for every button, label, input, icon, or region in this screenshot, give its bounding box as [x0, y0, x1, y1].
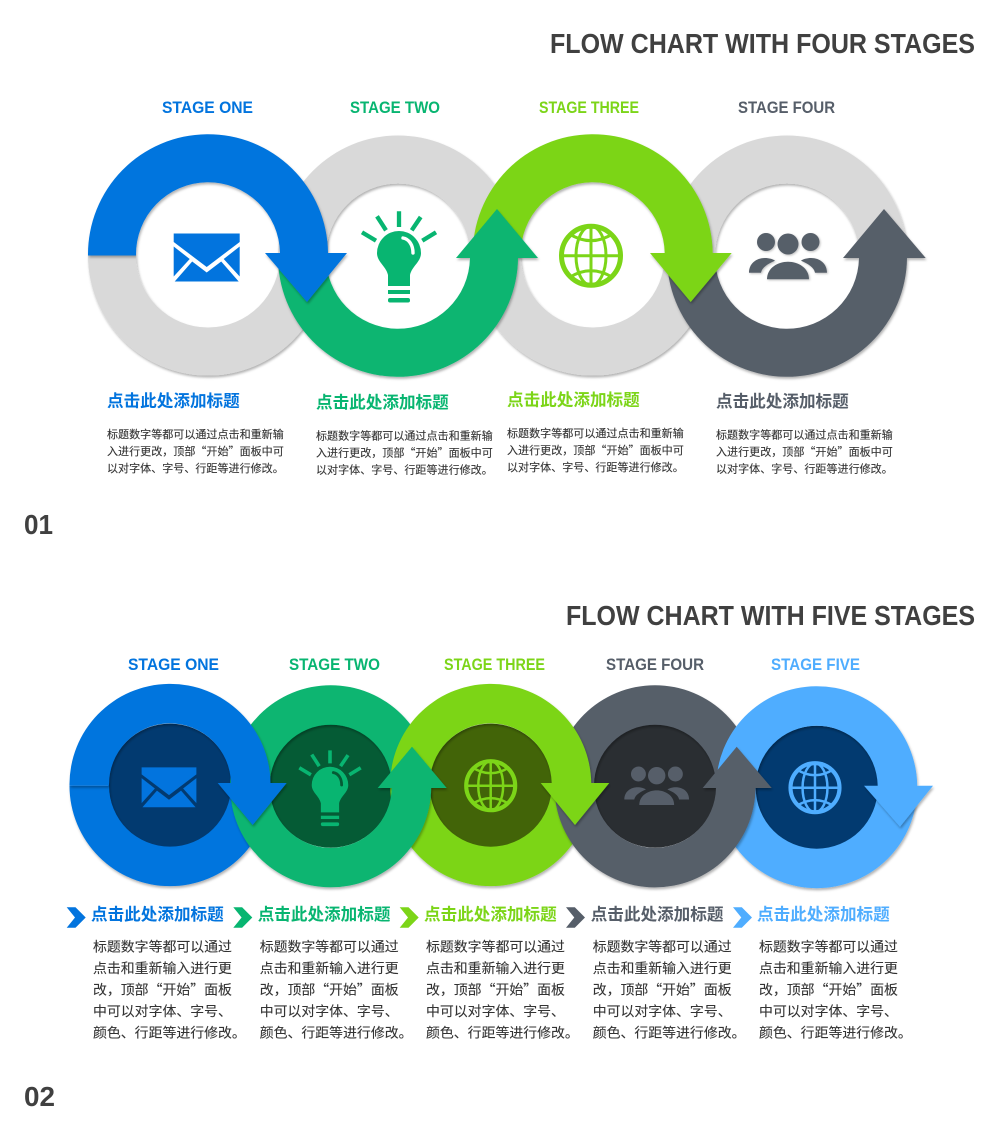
- text block: stage two: 改，顶部“开始”面板: [260, 980, 399, 1000]
- stage five label: STAGE FIVE: [771, 655, 860, 674]
- chevron: [233, 907, 252, 928]
- text block: stage one: 点击此处添加标题: [91, 901, 224, 925]
- stage two label: STAGE TWO: [350, 98, 440, 117]
- text block: stage two: 点击和重新输入进行更: [260, 958, 399, 978]
- text block: stage five: 点击此处添加标题: [757, 901, 890, 925]
- icon: light bulb: [362, 211, 436, 302]
- text block: stage five: 点击和重新输入进行更: [759, 958, 898, 978]
- text block: stage four: 入进行更改，顶部“开始”面板中可: [716, 444, 893, 460]
- stage three label: STAGE THREE: [539, 98, 639, 117]
- text block: stage two: 以对字体、字号、行距等进行修改。: [316, 462, 493, 478]
- stage one label: STAGE ONE: [128, 655, 219, 674]
- arrow arc: stage four: [554, 747, 772, 887]
- text block: stage five: 改，顶部“开始”面板: [759, 980, 898, 1000]
- chevron: [733, 907, 752, 928]
- text block: stage three: 点击此处添加标题: [424, 901, 557, 925]
- text block: stage five: [733, 901, 912, 1042]
- icon: people: [624, 767, 689, 805]
- arrow arc: stage two: [230, 747, 447, 887]
- text block: stage one: [107, 388, 284, 476]
- text block: stage two: 标题数字等都可以通过: [260, 936, 399, 956]
- text block: stage three: 点击此处添加标题: [507, 386, 640, 410]
- arrow arc: stage three: [473, 134, 732, 302]
- text block: stage three: 标题数字等都可以通过: [426, 936, 565, 956]
- text block: stage one: 以对字体、字号、行距等进行修改。: [107, 460, 284, 476]
- text block: stage two: 颜色、行距等进行修改。: [260, 1022, 413, 1042]
- chart: five-stage linked circle flow: [69, 684, 933, 888]
- text block: stage one: 点击此处添加标题: [107, 388, 240, 412]
- text block: stage one: 中可以对字体、字号、: [93, 1001, 232, 1021]
- stage four label: STAGE FOUR: [738, 98, 835, 117]
- section number 02: 02: [24, 1081, 55, 1112]
- text block: stage four: 改，顶部“开始”面板: [593, 980, 732, 1000]
- text block: stage one: 标题数字等都可以通过点击和重新输: [107, 426, 284, 442]
- text block: stage four: 点击和重新输入进行更: [593, 958, 732, 978]
- text block: stage two: 中可以对字体、字号、: [260, 1001, 399, 1021]
- text block: stage five: 中可以对字体、字号、: [759, 1001, 898, 1021]
- text block: stage one: 入进行更改，顶部“开始”面板中可: [107, 443, 284, 459]
- text block: stage three: 标题数字等都可以通过点击和重新输: [507, 425, 684, 441]
- text block: stage four: 标题数字等都可以通过: [593, 936, 732, 956]
- text block: stage three: [507, 386, 684, 475]
- chevron: [400, 907, 419, 928]
- text block: stage three: 以对字体、字号、行距等进行修改。: [507, 459, 684, 475]
- grey ring background segments: [88, 136, 907, 376]
- text block: stage two: 入进行更改，顶部“开始”面板中可: [316, 444, 493, 460]
- icon: light bulb: [299, 750, 361, 826]
- text block: stage two: 点击此处添加标题: [316, 389, 449, 413]
- chart: four-stage linked ring flow: [88, 134, 926, 377]
- text block: stage four: 中可以对字体、字号、: [593, 1001, 732, 1021]
- text block: stage three: 中可以对字体、字号、: [426, 1001, 565, 1021]
- text block: stage four: [716, 388, 893, 476]
- icon: globe: [790, 763, 840, 813]
- text block: stage one: [67, 901, 246, 1042]
- text block: stage three: 改，顶部“开始”面板: [426, 980, 565, 1000]
- text block: stage four: 点击此处添加标题: [716, 388, 849, 412]
- arrow arc: stage three: [390, 684, 609, 825]
- text block: stage one: 颜色、行距等进行修改。: [93, 1022, 246, 1042]
- arrow arc: stage one: [69, 684, 287, 825]
- text block: stage two: 点击此处添加标题: [258, 901, 391, 925]
- text block: stage four: [566, 901, 746, 1042]
- icon: globe: [561, 226, 621, 286]
- icon: people: [749, 233, 827, 279]
- text block: stage three: 点击和重新输入进行更: [426, 958, 565, 978]
- chevron: [67, 907, 86, 928]
- stage three label: STAGE THREE: [444, 655, 545, 674]
- text block: stage five: 颜色、行距等进行修改。: [759, 1022, 912, 1042]
- text block: stage one: 改，顶部“开始”面板: [93, 980, 232, 1000]
- stage one label: STAGE ONE: [162, 98, 253, 117]
- text block: stage three: [400, 901, 579, 1042]
- text block: stage four: 以对字体、字号、行距等进行修改。: [716, 460, 893, 476]
- stage two label: STAGE TWO: [289, 655, 380, 674]
- dark inner circles: [108, 724, 879, 850]
- arrow arc: stage two: [278, 209, 538, 377]
- icon: envelope: [174, 234, 240, 282]
- stage labels: five stages: [128, 655, 860, 674]
- text block: stage four: 标题数字等都可以通过点击和重新输: [716, 426, 893, 442]
- text block: stage five: 标题数字等都可以通过: [759, 936, 898, 956]
- text block: stage one: 点击和重新输入进行更: [93, 958, 232, 978]
- text block: stage four: 颜色、行距等进行修改。: [593, 1022, 746, 1042]
- text block: stage two: [316, 389, 493, 478]
- arrow arc: stage five: [716, 686, 933, 827]
- stage four label: STAGE FOUR: [606, 655, 704, 674]
- chevron: [566, 907, 585, 928]
- text block: stage four: 点击此处添加标题: [591, 901, 724, 925]
- text block: stage three: 入进行更改，顶部“开始”面板中可: [507, 442, 684, 458]
- arrow arc: stage one: [88, 134, 347, 302]
- text block: stage three: 颜色、行距等进行修改。: [426, 1022, 579, 1042]
- section number 01: 01: [24, 509, 53, 540]
- arrow arc: stage four: [667, 209, 926, 377]
- text block: stage two: 标题数字等都可以通过点击和重新输: [316, 428, 493, 444]
- text block: stage two: [233, 901, 413, 1042]
- stage labels: four stages: [162, 98, 835, 117]
- text block: stage one: 标题数字等都可以通过: [93, 936, 232, 956]
- coloured ring background segments: [70, 685, 917, 888]
- icon: globe: [466, 761, 516, 811]
- icon: envelope: [142, 767, 196, 807]
